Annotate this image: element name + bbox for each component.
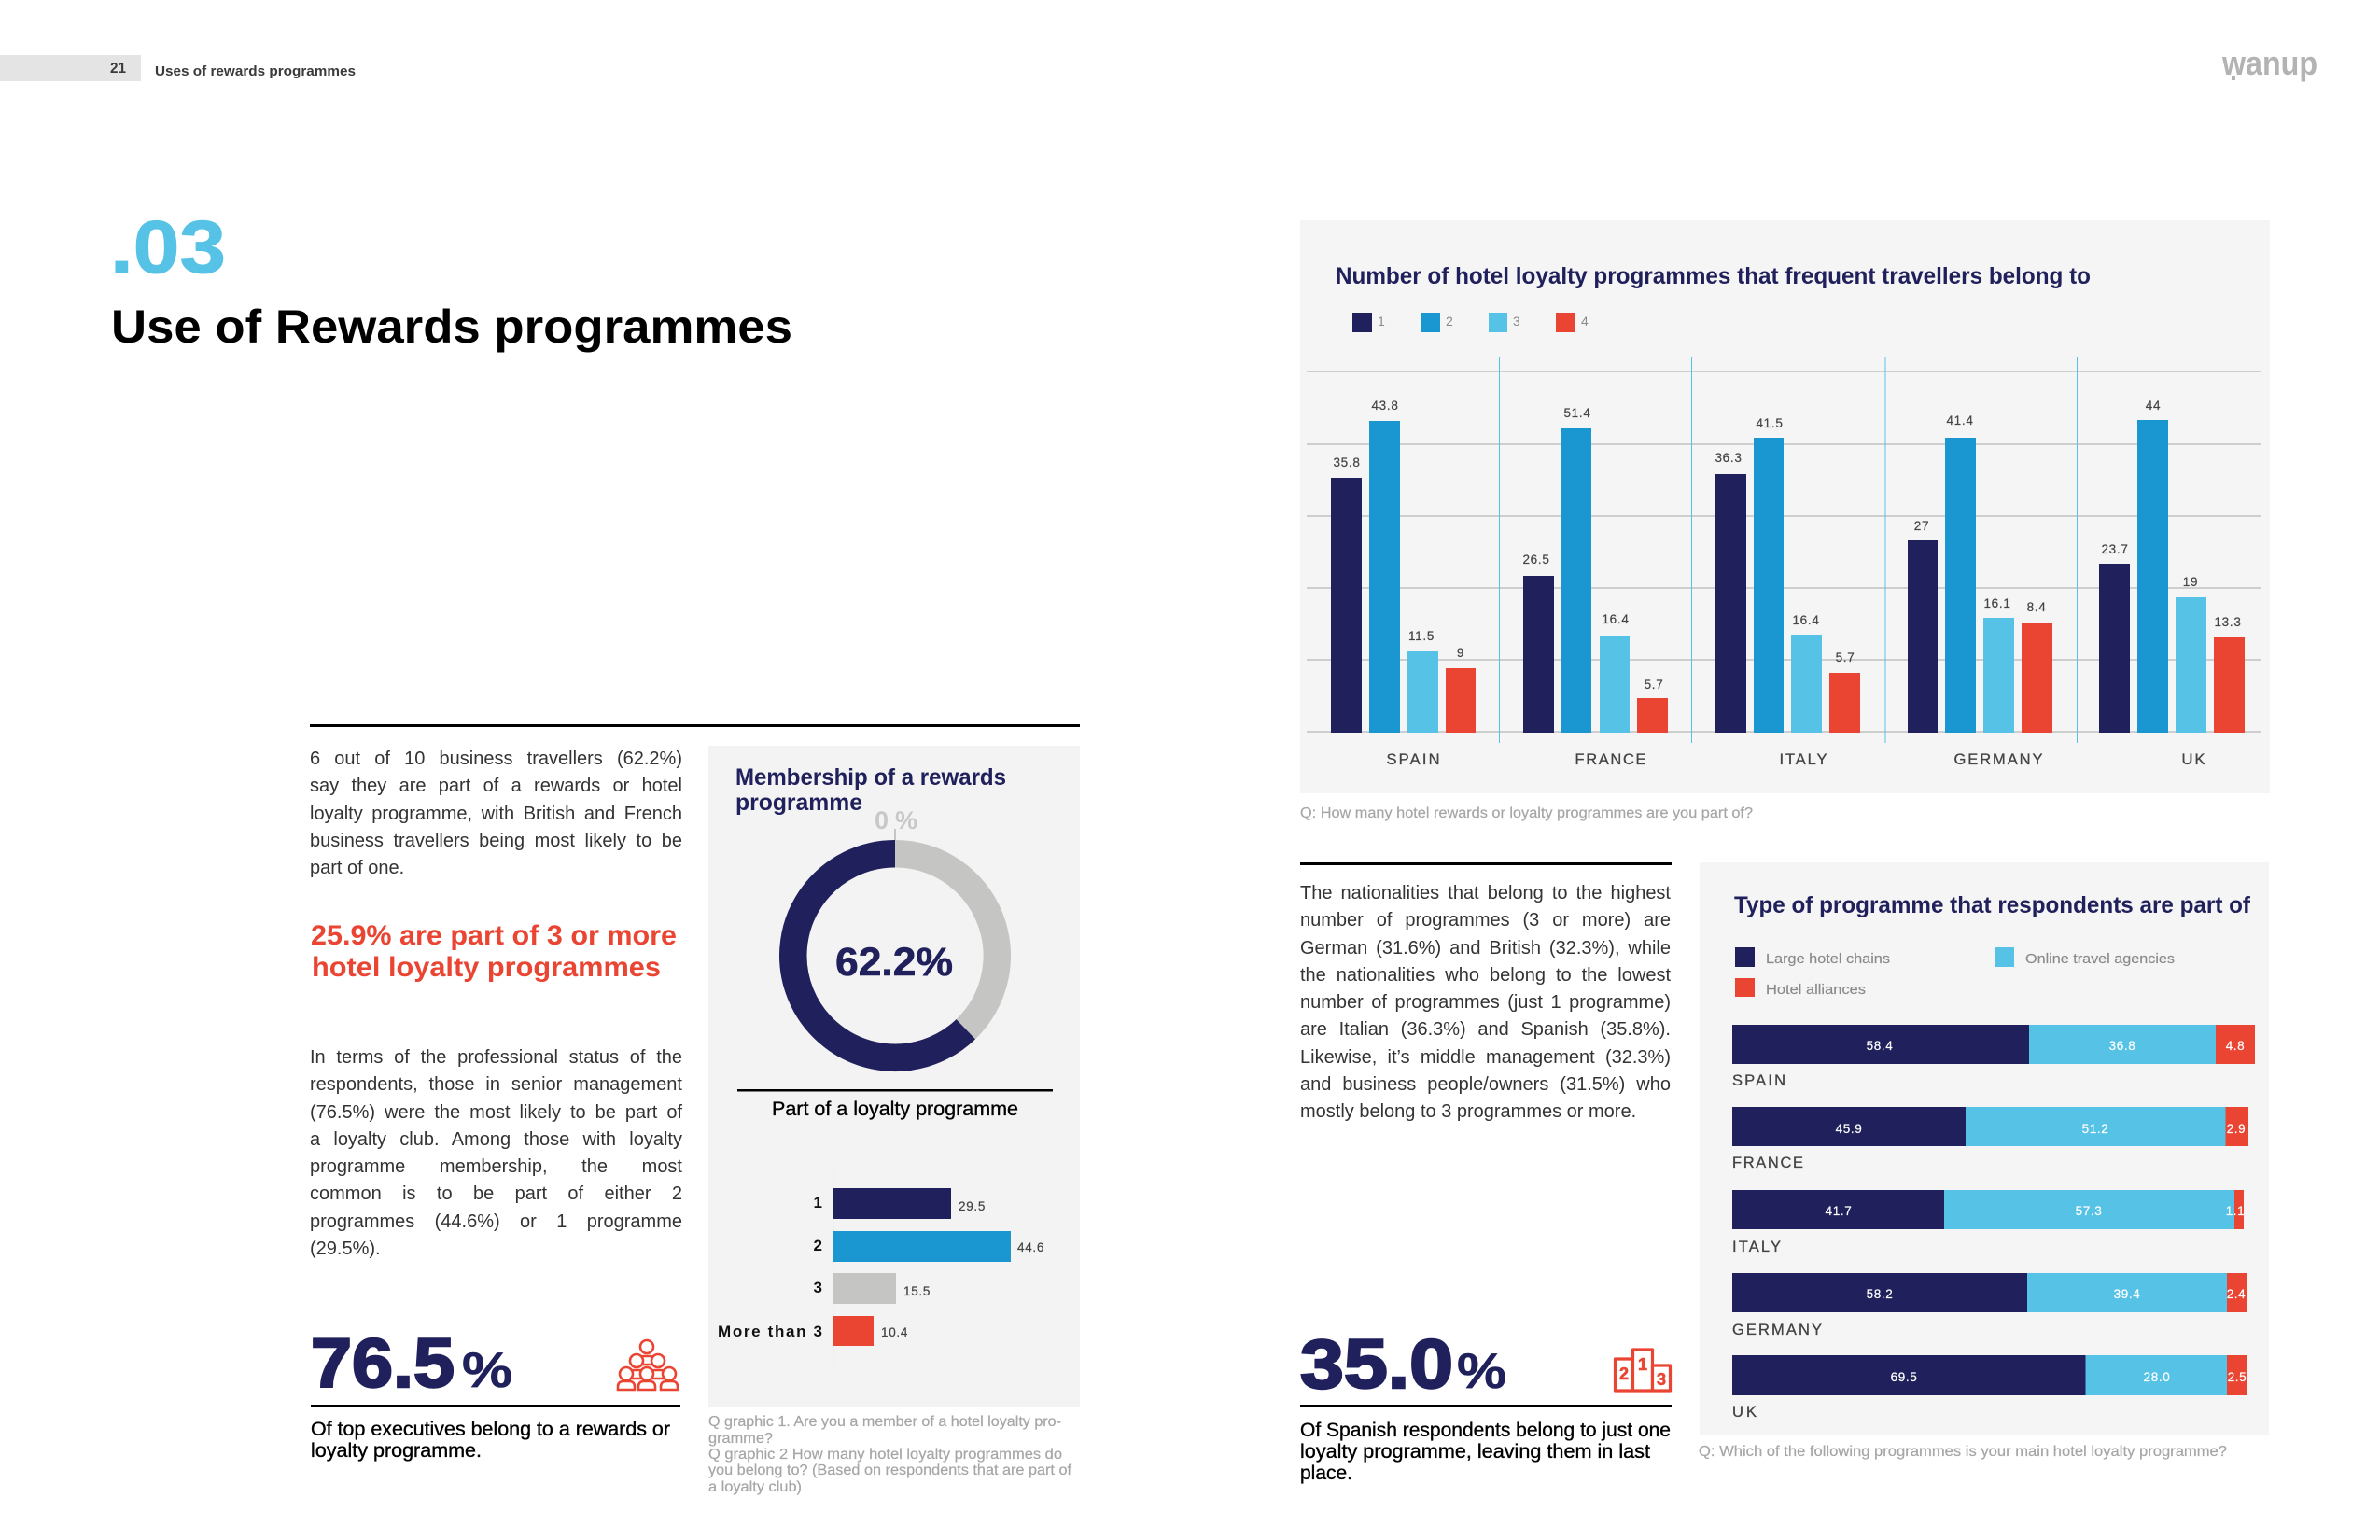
stacked bar: Spain — [1732, 1025, 2255, 1089]
clustered bars: Italy: 5.7 — [1836, 651, 1855, 665]
clustered bars: France — [1522, 406, 1668, 768]
stat rule and caption: Spanish respondents: loyalty programme, leaving them in last — [1300, 1441, 1650, 1463]
text block: nationalities: number of programmes (3 or more) are — [1300, 910, 1671, 931]
section number: .03 — [110, 205, 226, 288]
text block: nationalities: and business people/owners (31.5%) who — [1300, 1074, 1671, 1095]
clustered bars: Spain: 9 — [1457, 646, 1464, 660]
icon: podium: 3 — [1657, 1370, 1666, 1389]
bar chart: number of programmes: 29.5 — [959, 1199, 986, 1213]
bar chart: number of programmes: More than 3 — [718, 1323, 822, 1340]
callout: 25.9% red highlight: hotel loyalty programmes — [312, 952, 661, 983]
question note: loyalty programmes: Q: How many hotel rewards or loyalty programmes are you part of? — [1300, 805, 1753, 821]
header: page number and section name: Uses of rewards programmes — [155, 63, 356, 79]
stacked bar: Germany: 58.2 — [1867, 1287, 1893, 1301]
text block: 6 out of 10 business travellers: say they are part of a rewards or hotel — [310, 776, 682, 796]
legend: 1 to 4: 1 — [1378, 314, 1385, 329]
panel: number of hotel loyalty programmes — [1300, 220, 2270, 793]
text block: nationalities — [1300, 883, 1671, 1122]
stacked bar: UK: 69.5 — [1891, 1370, 1917, 1384]
bar chart: number of programmes: 2 — [814, 1237, 822, 1254]
text block: professional status: respondents, those in senior management — [310, 1074, 682, 1095]
clustered bars: Italy: 41.5 — [1756, 416, 1784, 430]
panel: type of programme — [1700, 862, 2269, 1435]
legend: 1 to 4: 4 — [1581, 314, 1589, 329]
stat rule and caption: Spanish respondents: Of Spanish respondents belong to just one — [1300, 1420, 1671, 1441]
text block: nationalities: the nationalities who belong to the lowest — [1300, 965, 1671, 986]
text block: professional status: programme membership, the most — [310, 1156, 682, 1177]
clustered bars: UK — [2099, 399, 2245, 768]
stacked bar: France: 51.2 — [2082, 1122, 2108, 1136]
question note: graphics 1 and 2: Q graphic 1. Are you a member of a hotel loyalty pro- — [708, 1414, 1061, 1430]
stacked bar: Spain: 4.8 — [2226, 1039, 2245, 1053]
text block: nationalities: mostly belong to 3 programmes or more. — [1300, 1101, 1636, 1122]
stacked bar: Spain: SPAIN — [1732, 1072, 1785, 1089]
clustered bars: France: 26.5 — [1522, 553, 1550, 567]
callout: 25.9% red highlight — [311, 920, 677, 983]
stat: 35.0%: 35.0 — [1300, 1325, 1453, 1403]
donut chart: 62.2% part of a loyalty programme — [793, 806, 997, 1057]
stacked bar: France: 45.9 — [1836, 1122, 1862, 1136]
clustered bars: UK: 23.7 — [2101, 542, 2129, 556]
text block: nationalities: Likewise, it’s middle management (32.3%) — [1300, 1047, 1671, 1068]
panel heading: number of programmes: Number of hotel loyalty programmes that frequent travellers belong to — [1336, 263, 2091, 289]
icon: podium — [1615, 1350, 1671, 1391]
stacked bar: UK: 2.5 — [2228, 1370, 2247, 1384]
icon: podium: 1 — [1638, 1355, 1647, 1374]
stacked bar: UK: UK — [1732, 1404, 1757, 1421]
clustered bars: Germany: 27 — [1914, 519, 1929, 533]
clustered bars: France: 16.4 — [1602, 612, 1630, 626]
clustered bars: Germany: GERMANY — [1954, 751, 2042, 768]
icon: podium: 2 — [1619, 1365, 1629, 1383]
stat rule and caption: top executives: Of top executives belong to a rewards or — [311, 1419, 670, 1440]
bar chart: number of programmes: 3 — [814, 1279, 822, 1296]
stat: 76.5% — [311, 1324, 512, 1402]
panel heading: type of programme: Type of programme that respondents are part of — [1734, 892, 2251, 918]
stacked bar: Germany: 39.4 — [2114, 1287, 2140, 1301]
bar chart: number of programmes: 10.4 — [881, 1325, 908, 1339]
stacked bar: France: FRANCE — [1732, 1155, 1803, 1171]
text block: 6 out of 10 business travellers — [310, 749, 682, 878]
clustered bars: Italy: 16.4 — [1792, 613, 1820, 627]
question note: graphics 1 and 2: Q graphic 2 How many hotel loyalty programmes do — [708, 1447, 1062, 1463]
icon: pyramid of people — [618, 1340, 678, 1390]
stat: 76.5%: 76.5 — [311, 1324, 455, 1402]
text block: professional status: (76.5%) were the most likely to be part of — [310, 1102, 682, 1123]
text block: professional status: (29.5%). — [310, 1239, 381, 1259]
stacked bar: UK — [1732, 1355, 2247, 1421]
question note: graphics 1 and 2 — [708, 1414, 1072, 1495]
clustered bars: Italy: 36.3 — [1715, 451, 1743, 465]
legend: programme types: Hotel alliances — [1766, 983, 1866, 998]
stat: 35.0% — [1300, 1325, 1506, 1403]
bar chart: number of programmes: 1 — [814, 1194, 822, 1211]
stacked bar: Spain: 58.4 — [1867, 1039, 1893, 1053]
header: page number and section name: 21 — [110, 61, 126, 77]
text block: professional status: In terms of the professional status of the — [310, 1047, 682, 1068]
stacked bar: Italy: 41.7 — [1826, 1204, 1852, 1218]
stacked bar: France: 2.9 — [2227, 1122, 2246, 1136]
stacked bar: France — [1732, 1107, 2248, 1171]
left column top rule — [310, 724, 1080, 727]
text block: 6 out of 10 business travellers: part of one. — [310, 858, 404, 878]
legend: programme types — [1735, 947, 2175, 998]
donut chart: 62.2% part of a loyalty programme: 62.2% — [835, 940, 953, 985]
clustered bars: Germany: 8.4 — [2027, 600, 2046, 614]
bar chart: number of programmes: 15.5 — [903, 1284, 931, 1298]
clustered bars: Spain: 11.5 — [1408, 629, 1435, 643]
text block: nationalities: are Italian (36.3%) and Spanish (35.8%). — [1300, 1019, 1671, 1040]
stat rule and caption: Spanish respondents — [1300, 1405, 1672, 1484]
clustered bars: Spain: 35.8 — [1333, 455, 1361, 469]
text block: nationalities: number of programmes (just 1 programme) — [1300, 992, 1671, 1013]
stat rule and caption: Spanish respondents: place. — [1300, 1463, 1352, 1484]
callout: 25.9% red highlight: 25.9% are part of 3 or more — [311, 920, 677, 951]
legend: 1 to 4: 3 — [1513, 314, 1520, 329]
stat: 35.0%: % — [1457, 1344, 1506, 1399]
stacked bar: Italy: 1.1 — [2226, 1204, 2245, 1218]
text block: professional status: common is to be part of either 2 — [310, 1183, 682, 1204]
bar chart: number of programmes: 44.6 — [1017, 1240, 1044, 1254]
clustered bars: Germany — [1908, 413, 2052, 768]
text block: 6 out of 10 business travellers: business travellers being most likely to be — [310, 831, 682, 851]
legend: programme types: Online travel agencies — [2025, 952, 2175, 967]
clustered bars: France: FRANCE — [1575, 751, 1646, 768]
stat rule and caption: top executives — [311, 1405, 680, 1462]
text block: professional status — [310, 1047, 683, 1259]
clustered bars: Spain — [1331, 399, 1476, 768]
legend: 1 to 4 — [1352, 313, 1589, 332]
clustered bars: UK: 13.3 — [2214, 615, 2242, 629]
stacked bar: UK: 28.0 — [2144, 1370, 2170, 1384]
question note: graphics 1 and 2: gramme? — [708, 1431, 773, 1447]
right column rule — [1300, 862, 1672, 865]
clustered bars: Germany: 41.4 — [1946, 413, 1974, 427]
stacked bar: Spain: 36.8 — [2109, 1039, 2135, 1053]
question note: graphics 1 and 2: you belong to? (Based on respondents that are part of — [708, 1463, 1072, 1478]
panel heading: membership — [735, 764, 1006, 816]
stat rule and caption: top executives: loyalty programme. — [311, 1440, 482, 1462]
clustered bars: Spain: SPAIN — [1387, 751, 1439, 768]
donut caption: Part of a loyalty programme — [772, 1099, 1018, 1120]
clustered bars: Germany: 16.1 — [1983, 596, 2011, 610]
clustered bars: UK: 19 — [2183, 575, 2198, 589]
clustered bars: France: 51.4 — [1563, 406, 1591, 420]
text block: professional status: a loyalty club. Among those with loyalty — [310, 1129, 682, 1150]
legend: 1 to 4: 2 — [1446, 314, 1453, 329]
text block: nationalities: The nationalities that belong to the highest — [1300, 883, 1671, 903]
text block: professional status: programmes (44.6%) or 1 programme — [310, 1211, 682, 1232]
stacked bar: Germany: GERMANY — [1732, 1322, 1822, 1338]
question note: graphics 1 and 2: a loyalty club) — [708, 1479, 802, 1495]
clustered bars: Italy — [1715, 416, 1860, 768]
stacked bar: Italy: ITALY — [1732, 1239, 1781, 1255]
page title: Use of Rewards programmes — [111, 301, 792, 353]
panel heading: membership: programme — [735, 790, 862, 816]
stacked bar: Germany — [1732, 1273, 2247, 1338]
stat: 76.5%: % — [462, 1343, 512, 1398]
text block: 6 out of 10 business travellers: 6 out of 10 business travellers (62.2%) — [310, 749, 682, 769]
panel heading: membership: Membership of a rewards — [735, 764, 1006, 791]
chart gridlines and separators — [1307, 357, 2261, 743]
clustered bars: UK: UK — [2182, 751, 2205, 768]
bar chart: number of programmes — [718, 1164, 1044, 1372]
clustered bars: France: 5.7 — [1645, 678, 1663, 692]
clustered bars: Spain: 43.8 — [1371, 399, 1399, 413]
clustered bars: UK: 44 — [2146, 399, 2161, 413]
stacked bar: Italy — [1732, 1190, 2245, 1255]
stacked bar: Italy: 57.3 — [2076, 1204, 2102, 1218]
clustered bars: Italy: ITALY — [1779, 751, 1827, 768]
panel: membership of a rewards programme — [708, 746, 1080, 1407]
text block: 6 out of 10 business travellers: loyalty programme, with British and French — [310, 804, 682, 824]
text block: nationalities: German (31.6%) and British (32.3%), while — [1300, 938, 1671, 959]
donut chart: 62.2% part of a loyalty programme: 0 % — [875, 806, 917, 834]
question note: main programme: Q: Which of the following programmes is your main hotel loyalty programme? — [1699, 1444, 2227, 1460]
logo: wanup: wanup — [2221, 44, 2317, 82]
legend: programme types: Large hotel chains — [1766, 952, 1890, 967]
stacked bar: Germany: 2.4 — [2227, 1287, 2246, 1301]
header: page number and section name — [0, 55, 356, 81]
